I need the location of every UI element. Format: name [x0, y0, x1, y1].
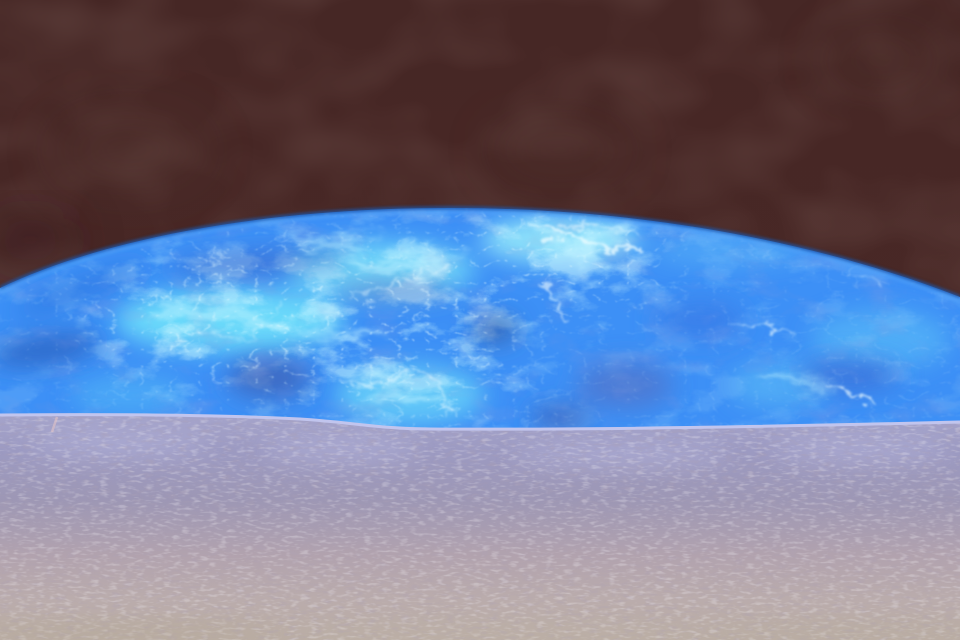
- dome base colour: [0, 200, 960, 435]
- dome rim: dark blue outline with glow: [0, 208, 960, 301]
- dome: white caustic wisps: [160, 225, 880, 410]
- floor: light pebble texture: [0, 410, 960, 640]
- dome: dark indigo water patches: [0, 248, 900, 430]
- dome: bright cyan water patches: [70, 216, 950, 425]
- waterline: pale lavender edge of the floor: [0, 415, 960, 429]
- dome: fine foam filaments: [0, 200, 960, 435]
- floor: dark pebble texture: [102, 434, 616, 448]
- floor: pink scratch near waterline: [52, 417, 57, 432]
- floor: pale caustic streaks near the waterline: [62, 437, 917, 467]
- dome: glowing blue water sphere: [0, 200, 960, 435]
- dome: cloud-like cyan foam: [0, 200, 960, 435]
- floor: pale foreground dust: [12, 622, 237, 640]
- floor: translucent pebbled sand: [0, 410, 960, 640]
- dome: soft pale foam bands: [150, 226, 820, 402]
- floor base gradient: [0, 410, 960, 640]
- dome: turbulent purple shadows: [0, 200, 960, 435]
